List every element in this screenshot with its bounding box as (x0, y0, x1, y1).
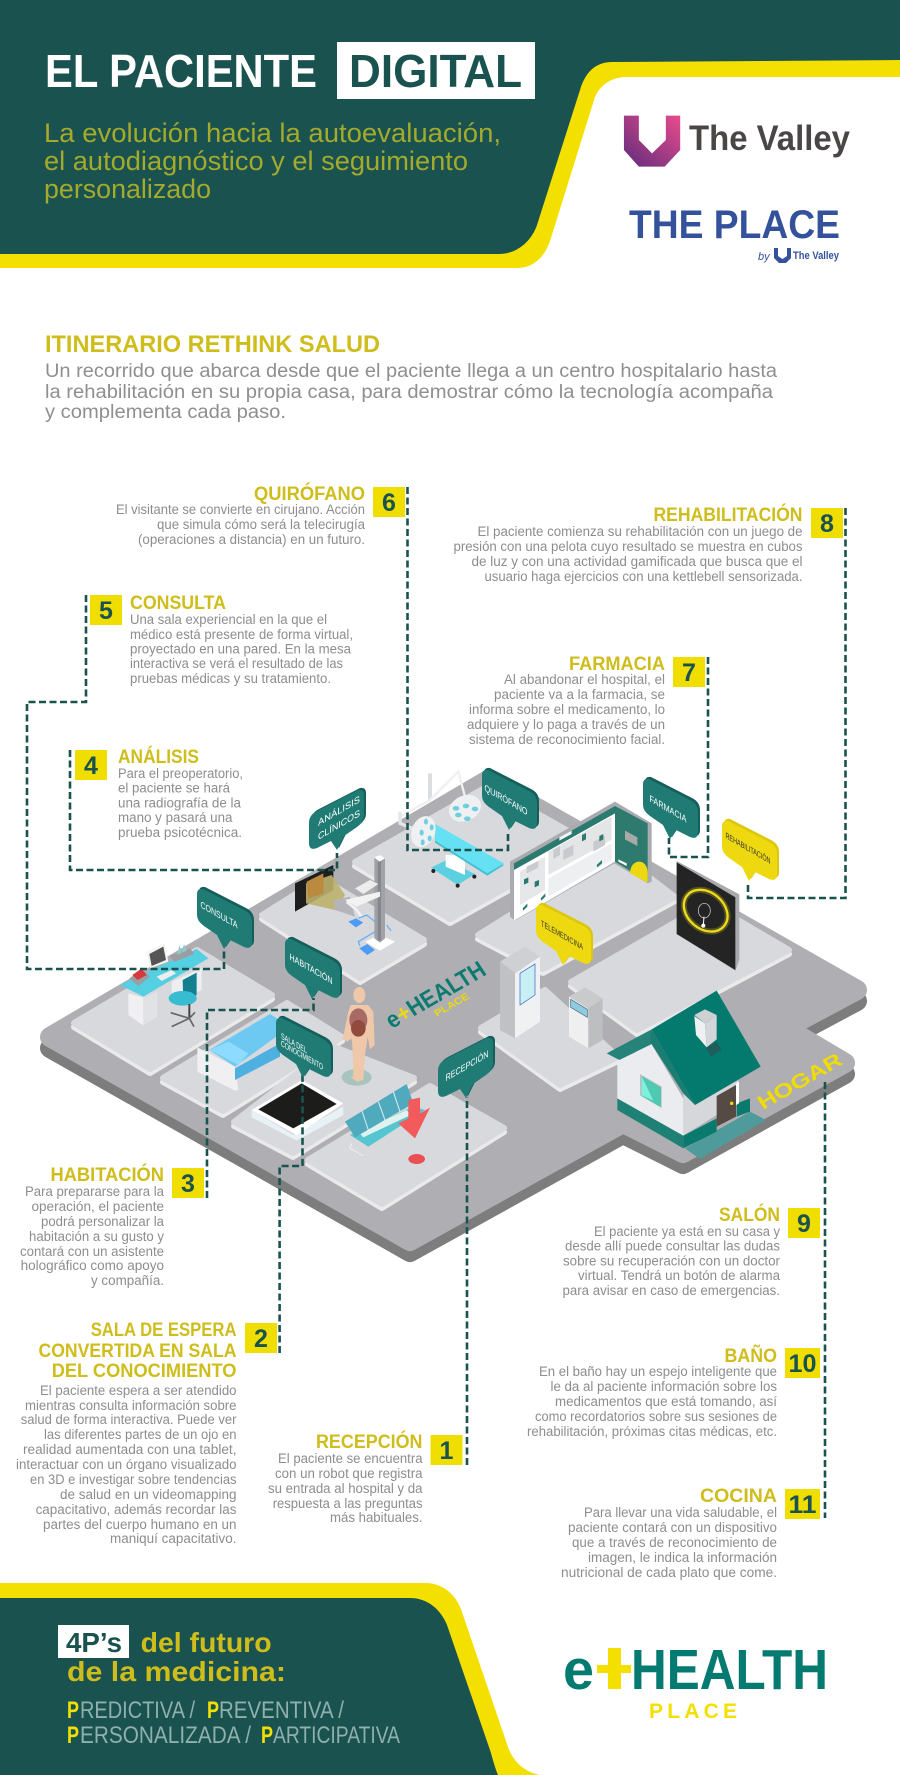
step 2: sala de espera: las diferentes partes de un ojo en (44, 1427, 236, 1442)
step 7: farmacia: FARMACIA (569, 654, 665, 675)
step 9: salon: SALÓN (719, 1204, 780, 1226)
logo: The Place: The Valley (793, 250, 840, 262)
logo: The Place (629, 203, 840, 263)
icon: bed (197, 1014, 290, 1091)
step 5: consulta: interactiva se verá el resultado de las (130, 656, 343, 671)
step 5: consulta: médico está presente de forma virtual, (130, 627, 353, 642)
map tag: sala del conocimiento: CONOCIMIENTO (281, 1038, 323, 1072)
connector: 5 consulta (27, 595, 224, 969)
map tag: farmacia (643, 777, 700, 839)
footer list: predictiva preventiva personalizada participativa: P (67, 1697, 79, 1724)
step 1: recepcion: su entrada al hospital y da (268, 1481, 423, 1496)
map tag: recepcion: RECEPCIÓN (446, 1047, 488, 1084)
step 8: rehabilitacion: de luz y con una actividad gamificada que busca que el (472, 554, 802, 569)
map tag: habitacion (285, 937, 342, 999)
map tag: sala del conocimiento: SALA DEL (281, 1031, 307, 1055)
connector: 7 farmacia (669, 657, 708, 857)
connector: 6 quirofano (408, 487, 508, 850)
step 6: quirofano: (operaciones a distancia) en un futuro. (138, 532, 365, 547)
scene: telemedicina and rehabilitacion objects (500, 802, 739, 1048)
icon: interactive tablet (252, 1080, 343, 1141)
step 10: bano: le da al paciente información sobre los (550, 1379, 777, 1394)
step 11: cocina: que a través de reconocimiento de (572, 1535, 777, 1550)
footer list: predictiva preventiva personalizada participativa: ARTICIPATIVA (273, 1722, 400, 1749)
step 2: sala de espera: CONVERTIDA EN SALA (38, 1341, 237, 1362)
footer list: predictiva preventiva personalizada participativa: P (261, 1722, 273, 1749)
step 2: sala de espera: realidad aumentada con una tablet, (23, 1442, 237, 1457)
map tag: telemedicina: TELEMEDICINA (541, 918, 584, 952)
step 2: sala de espera: de salud en un videomapping (60, 1487, 237, 1502)
room tile: rehabilitacion (571, 903, 789, 1034)
step 9: salon: desde allí puede consultar las dudas (565, 1239, 780, 1254)
map tag: habitacion: HABITACIÓN (290, 950, 332, 987)
step 5: consulta: proyectado en una pared. En la mesa (130, 642, 351, 656)
footer heading: 4Ps: del futuro (141, 1627, 272, 1658)
room tile: consulta (74, 950, 272, 1073)
room tile: habitacion (163, 1003, 342, 1115)
step 11: cocina: COCINA (700, 1486, 777, 1507)
map tag: consulta (197, 887, 254, 949)
step 2: sala de espera: SALA DE ESPERA (91, 1320, 237, 1341)
step 8: rehabilitacion: El paciente comienza su rehabilitación con un juego de (478, 524, 802, 539)
logo: eHealth Place: HEALTH (631, 1638, 828, 1702)
connector: 3 habitacion (207, 998, 314, 1198)
step 2: sala de espera (16, 1320, 277, 1546)
map tag: consulta: CONSULTA (200, 900, 238, 932)
step 2: sala de espera: en 3D e investigar sobre tendencias (30, 1472, 237, 1487)
intro text (45, 361, 777, 423)
step 6: quirofano (116, 483, 405, 547)
step 3: habitacion: HABITACIÓN (50, 1164, 164, 1186)
icon: red arrow (398, 1098, 430, 1138)
step 9: salon: virtual. Tendrá un botón de alarma (578, 1268, 780, 1283)
map tag: analisis clinicos (309, 788, 366, 850)
icon: consulting desk (120, 943, 208, 1027)
icon: rehabilitation screen (675, 861, 739, 971)
room tile: telemedicina (481, 990, 618, 1089)
icon: operating table (407, 813, 504, 888)
footer list: predictiva preventiva personalizada participativa: ERSONALIZADA / (80, 1722, 251, 1749)
step 4: analisis: mano y pasará una (118, 810, 233, 825)
step 3: habitacion: habitación a su gusto y (29, 1229, 164, 1244)
logo: The Place: by (758, 251, 771, 263)
footer list: predictiva preventiva personalizada participativa: P (67, 1722, 79, 1749)
title: DIGITAL (349, 45, 522, 97)
step 5: consulta: CONSULTA (130, 593, 226, 614)
step 4: analisis: el paciente se hará (118, 780, 230, 796)
step 8: rehabilitacion: REHABILITACIÓN (654, 504, 802, 526)
step 5: consulta: Una sala experiencial en la que el (130, 612, 327, 627)
step 9: salon: 9 (797, 1210, 811, 1238)
step 2: sala de espera: mientras consulta información sobre (25, 1398, 236, 1413)
step 6: quirofano: El visitante se convierte en cirujano. Acción (116, 502, 365, 517)
step 10: bano: medicamentos que está tomando, así (555, 1394, 777, 1409)
connector: 9 10 11 hogar (824, 1082, 826, 1518)
map tag: quirofano (482, 768, 539, 830)
step 4: analisis: ANÁLISIS (118, 746, 199, 768)
map tag: recepcion (438, 1036, 495, 1098)
step 3: habitacion: 3 (181, 1170, 195, 1198)
step 10: bano: BAÑO (724, 1345, 777, 1367)
step 8: rehabilitacion: 8 (820, 510, 834, 538)
step 8: rehabilitacion: usuario haga ejercicios con una kettlebell sensorizada. (484, 569, 802, 584)
step 9: salon (562, 1204, 820, 1298)
step 1: recepcion: El paciente se encuentra (278, 1451, 423, 1466)
icon: operating lamps (400, 772, 485, 828)
step 11: cocina (561, 1486, 820, 1580)
step 10: bano: rehabilitación, próximas citas médicas, etc. (527, 1424, 777, 1439)
step 4: analisis (75, 746, 243, 840)
icon: kiosk (500, 947, 540, 1038)
step 2: sala de espera: partes del cuerpo humano en un (43, 1517, 236, 1532)
step 1: recepcion: más habituales. (330, 1510, 422, 1525)
step 11: cocina: paciente contará con un dispositivo (568, 1520, 777, 1535)
connector: 1 recepcion (466, 1097, 468, 1465)
step 1: recepcion: con un robot que registra (275, 1466, 423, 1481)
step 5: consulta: 5 (99, 597, 113, 625)
map tag: quirofano: QUIRÓFANO (484, 781, 528, 818)
icon: telemedicine wall (510, 802, 652, 921)
step 9: salon: El paciente ya está en su casa y (594, 1224, 780, 1239)
footer list: predictiva preventiva personalizada participativa: REVENTIVA / (219, 1697, 344, 1724)
intro heading: ITINERARIO RETHINK SALUD (45, 331, 380, 358)
HOGAR floor label: HOGAR (754, 1049, 847, 1114)
logo: The Place: THE PLACE (629, 203, 840, 247)
intro text: la rehabilitación en su propia casa, para demostrar cómo la tecnología acompaña (45, 382, 773, 403)
step 10: bano: En el baño hay un espejo inteligente que (539, 1364, 777, 1379)
step 10: bano: 10 (788, 1350, 816, 1378)
step 5: consulta (90, 593, 353, 686)
step 3: habitacion (20, 1164, 204, 1288)
step 2: sala de espera: 2 (254, 1325, 268, 1353)
step 3: habitacion: Para prepararse para la (25, 1184, 164, 1199)
logo: eHealth Place: PLACE (649, 1700, 737, 1723)
icon: x-ray machine (294, 855, 395, 955)
connector: 2 sala (280, 1073, 302, 1353)
logo: eHealth Place: e (563, 1638, 594, 1702)
map tag: telemedicina (536, 903, 593, 965)
room tile: sala (234, 1046, 414, 1157)
floor logo: eHealth: e+HEALTH (380, 957, 491, 1034)
step 1: recepcion (268, 1431, 462, 1525)
map tag: rehabilitacion: REHABILITACIÓN (726, 831, 770, 866)
step 4: analisis: 4 (84, 752, 98, 780)
footer band (0, 1583, 540, 1775)
step 11: cocina: nutricional de cada plato que come. (561, 1565, 777, 1580)
footer list: predictiva preventiva personalizada participativa (67, 1697, 400, 1749)
scene: consulta and habitacion objects (120, 943, 375, 1141)
step 4: analisis: Para el preoperatorio, (118, 766, 243, 781)
footer heading: 4Ps: de la medicina: (67, 1656, 286, 1687)
step 3: habitacion: operación, el paciente (32, 1199, 164, 1214)
step 4: analisis: prueba psicotécnica. (118, 825, 242, 840)
room tile: analisis (262, 878, 424, 982)
step 1: recepcion: 1 (440, 1437, 454, 1465)
icon: robot terminal (569, 987, 603, 1048)
logo: The Valley: The Valley (689, 119, 850, 158)
step 1: recepcion: respuesta a las preguntas (273, 1496, 423, 1511)
subtitle (44, 118, 501, 204)
intro text: Un recorrido que abarca desde que el paciente llega a un centro hospitalario hasta (45, 361, 777, 382)
subtitle: personalizado (44, 174, 211, 204)
step 11: cocina: 11 (788, 1491, 817, 1519)
header band (0, 0, 900, 268)
step 9: salon: para avisar en caso de emergencias. (562, 1283, 780, 1298)
room tile: recepcion (308, 1086, 504, 1208)
step 3: habitacion: holográfico como apoyo (21, 1258, 164, 1273)
scene: analisis and quirofano objects (294, 772, 504, 955)
subtitle: el autodiagnóstico y el seguimiento (44, 146, 468, 176)
icon: house (607, 991, 766, 1159)
step 6: quirofano: 6 (382, 489, 396, 517)
footer heading: 4Ps: 4P’s (66, 1627, 122, 1658)
map tag: sala del conocimiento (276, 1016, 333, 1078)
step 6: quirofano: que simula cómo será la telecirugía (157, 517, 365, 532)
step 2: sala de espera: capacitativo, además recordar las (36, 1502, 237, 1517)
scene: recepcion objects (345, 1084, 430, 1164)
icon: waiting chairs (345, 1084, 425, 1156)
title: EL PACIENTE (45, 45, 317, 97)
map tag: analisis clinicos: ANÁLISIS (318, 793, 360, 829)
step 2: sala de espera: DEL CONOCIMIENTO (52, 1361, 237, 1382)
step 4: analisis: una radiografía de la (118, 796, 241, 810)
footer heading: 4Ps (58, 1625, 286, 1687)
step 8: rehabilitacion: presión con una pelota cuyo resultado se muestra en cubos (454, 539, 803, 554)
step 10: bano (527, 1345, 820, 1439)
step 7: farmacia: Al abandonar el hospital, el (504, 672, 665, 687)
logo: eHealth Place (563, 1638, 828, 1723)
footer list: predictiva preventiva personalizada participativa: REDICTIVA / (80, 1697, 195, 1724)
step 3: habitacion: podrá personalizar la (41, 1214, 164, 1229)
step 8: rehabilitacion (454, 504, 843, 584)
map tag: farmacia: FARMACIA (650, 794, 687, 826)
intro text: y complementa cada paso. (45, 402, 286, 423)
step 3: habitacion: y compañía. (91, 1273, 164, 1288)
connector: 4 analisis (70, 750, 337, 870)
step 10: bano: como recordatorios sobre sus sesiones de (535, 1409, 777, 1424)
footer list: predictiva preventiva personalizada participativa: P (207, 1697, 219, 1724)
step 5: consulta: pruebas médicas y su tratamiento. (130, 671, 331, 686)
map tag: analisis clinicos: CLÍNICOS (318, 807, 360, 843)
connector: 8 rehabilitacion (748, 508, 846, 898)
map tag: rehabilitacion (722, 819, 779, 881)
subtitle: La evolución hacia la autoevaluación, (44, 118, 501, 148)
step 2: sala de espera: El paciente espera a ser atendido (40, 1383, 236, 1398)
step 7: farmacia (467, 654, 705, 747)
room tile: farmacia (478, 850, 675, 973)
step 2: sala de espera: maniquí capacitativo. (110, 1531, 236, 1546)
step 2: sala de espera: salud de forma interactiva. Puede ver (21, 1412, 237, 1427)
room tile: quirofano (355, 786, 588, 923)
step 7: farmacia: 7 (682, 659, 696, 687)
step 3: habitacion: contará con un asistente (20, 1244, 164, 1259)
floor logo: eHealth: PLACE (433, 991, 472, 1019)
step 7: farmacia: adquiere y lo paga a través de un (467, 717, 665, 732)
step 11: cocina: imagen, le indica la información (588, 1550, 777, 1565)
icon: anatomical mannequin (342, 987, 375, 1086)
isometric floor map (50, 780, 857, 1252)
logo: The Valley (624, 116, 850, 167)
step 2: sala de espera: interactuar con un órgano visualizado (16, 1457, 236, 1472)
step 7: farmacia: sistema de reconocimiento facial. (469, 732, 665, 747)
icon: red dot (408, 1154, 425, 1164)
title (45, 42, 535, 99)
step 7: farmacia: informa sobre el medicamento, lo (469, 702, 665, 717)
step 1: recepcion: RECEPCIÓN (316, 1431, 422, 1453)
step 6: quirofano: QUIRÓFANO (254, 483, 365, 505)
step 11: cocina: Para llevar una vida saludable, el (584, 1505, 777, 1520)
step 7: farmacia: paciente va a la farmacia, se (494, 687, 665, 702)
step 9: salon: sobre su recuperación con un doctor (563, 1254, 780, 1268)
